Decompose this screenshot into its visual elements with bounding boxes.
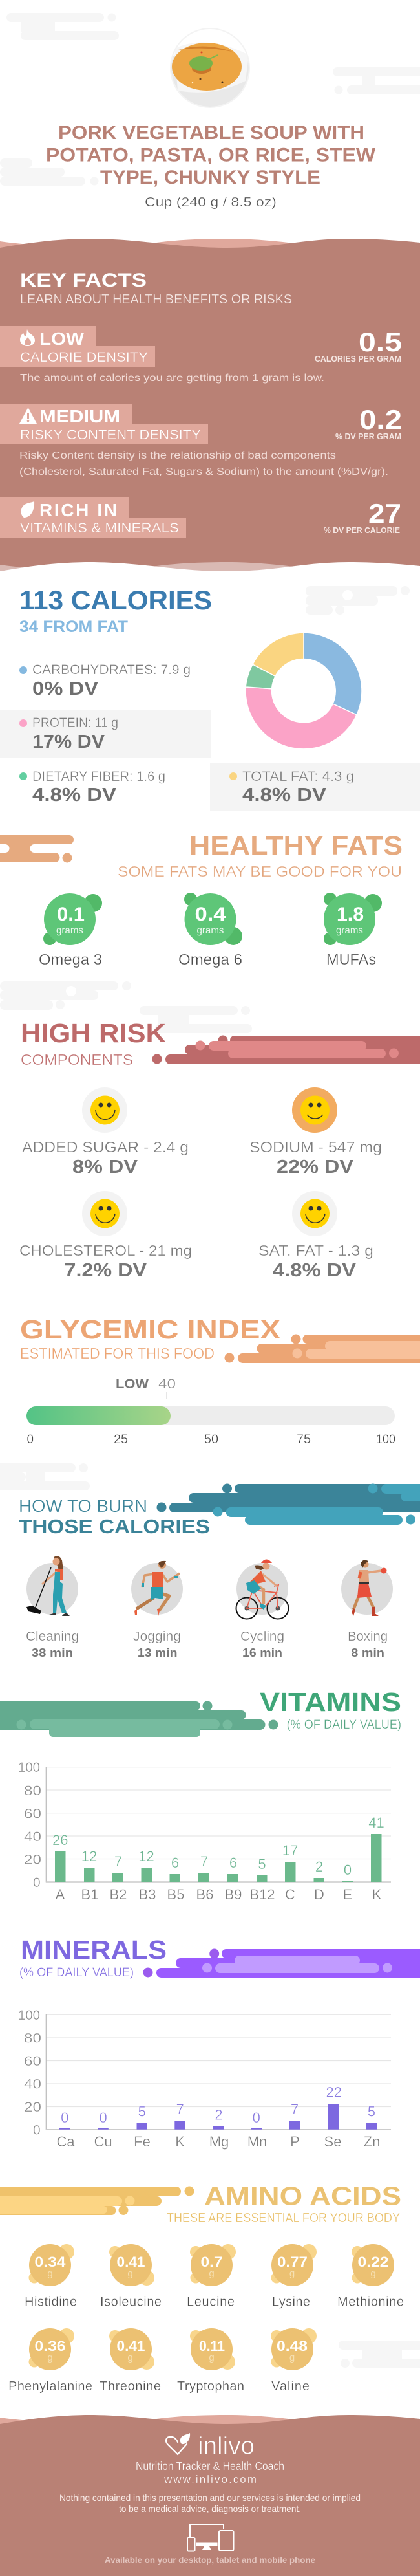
heading: key facts: LEARN ABOUT HEALTH BENEFITS OR RISKS (20, 292, 292, 307)
amino: isoleucine (100, 2244, 162, 2309)
bar chart: minerals: 5 (138, 2104, 146, 2120)
heading: glycemic index: GLYCEMIC INDEX (20, 1315, 280, 1344)
bar chart: vitamins: K (372, 1886, 382, 1903)
heading: minerals: (% OF DAILY VALUE) (19, 1965, 134, 1980)
fact: rich in vitamins and minerals: 27 (368, 498, 401, 529)
bar chart: vitamins: 41 (368, 1815, 384, 1831)
activity: boxing: Boxing (348, 1630, 388, 1644)
bar chart: minerals: 40 (24, 2077, 41, 2091)
fact: medium risky content density: RISKY CONTENT DENSITY (20, 427, 201, 442)
risk: added sugar (22, 1087, 189, 1177)
risk: cholesterol (19, 1191, 192, 1281)
fact: medium risky content density (0, 404, 402, 477)
bar chart: minerals: Zn (364, 2134, 380, 2150)
heading: amino acids (167, 2181, 401, 2225)
bar chart: vitamins: 6 (171, 1855, 179, 1871)
activity: jogging (131, 1561, 183, 1659)
amino: lysine (271, 2244, 317, 2309)
amino: phenylalanine (8, 2328, 92, 2394)
activity: jogging: 13 min (138, 1646, 177, 1659)
legend: dietary fiber (19, 769, 165, 805)
bar chart: minerals: Ca (57, 2134, 75, 2150)
bar chart: minerals: 80 (24, 2031, 41, 2046)
bar chart: vitamins: B3 (139, 1886, 156, 1903)
amino: tryptophan (177, 2328, 244, 2394)
panel: key facts (0, 239, 420, 579)
legend: protein: PROTEIN: 11 g (32, 715, 118, 730)
legend: total fat (229, 769, 354, 805)
activity: cleaning (26, 1556, 79, 1659)
heading: high risk (21, 1018, 166, 1068)
bar chart: vitamins: B6 (196, 1886, 213, 1903)
fact: medium risky content density: Risky Content density is the relationship of bad components (19, 450, 336, 461)
fact: rich in vitamins and minerals: % DV PER CALORIE (324, 526, 400, 535)
amino: methionine (337, 2244, 404, 2309)
header bars: high risk (152, 1035, 420, 1064)
activity: boxing: 8 min (351, 1646, 384, 1659)
legend: carbohydrates: CARBOHYDRATES: 7.9 g (32, 662, 191, 677)
risk: saturated fat: SAT. FAT - 1.3 g (258, 1242, 373, 1259)
activity: cycling: Cycling (240, 1630, 284, 1644)
legend: total fat: TOTAL FAT: 4.3 g (242, 769, 354, 784)
stat: mufas: grams (336, 925, 363, 936)
amino: isoleucine: 0.41 (116, 2254, 145, 2270)
availability note: Available on your desktop, tablet and mobile phone (105, 2555, 315, 2565)
bar chart: vitamins: C (285, 1886, 295, 1903)
bar chart: minerals: Cu (94, 2134, 112, 2150)
legend: carbohydrates: 0% DV (32, 679, 99, 699)
bar chart: vitamins: 20 (24, 1853, 41, 1868)
bar chart: minerals: 5 (368, 2104, 375, 2120)
fact: low calorie density: CALORIE DENSITY (20, 349, 148, 365)
amino: isoleucine: g (127, 2268, 133, 2279)
title: PORK VEGETABLE SOUP WITH (58, 122, 364, 144)
amino: tryptophan: g (209, 2352, 215, 2363)
fact: medium risky content density: % DV PER GRAM (335, 432, 401, 441)
heading: vitamins: (% OF DAILY VALUE) (287, 1718, 401, 1732)
amino: histidine: g (47, 2268, 53, 2279)
heading: glycemic index: ESTIMATED FOR THIS FOOD (20, 1345, 215, 1362)
bar chart: minerals: Mg (209, 2134, 229, 2150)
image: bowl of soup (169, 28, 250, 108)
footer url: www.inlivo.com (163, 2473, 257, 2485)
amino: valine (271, 2328, 317, 2394)
gauge: glycemic index: 25 (114, 1433, 128, 1446)
bar chart: vitamins: 12 (138, 1848, 154, 1864)
gauge: glycemic index (26, 1377, 395, 1446)
risk: saturated fat (258, 1191, 373, 1281)
bar chart: minerals: Fe (134, 2134, 151, 2150)
stat: mufas: MUFAs (326, 951, 376, 968)
heading: high risk: HIGH RISK (21, 1018, 166, 1048)
legend band: protein (0, 710, 211, 758)
gauge: glycemic index: 75 (297, 1433, 311, 1446)
amino: histidine: 0.34 (35, 2254, 66, 2270)
heading: how to burn: HOW TO BURN (19, 1496, 147, 1516)
bar chart: vitamins: 6 (229, 1855, 237, 1871)
amino: threonine: 0.41 (116, 2338, 145, 2354)
panel: footer (0, 2415, 420, 2576)
bar chart: minerals: 0 (253, 2110, 260, 2126)
heading: healthy fats (118, 831, 403, 880)
fact: low calorie density: 0.5 (359, 327, 402, 357)
bar chart: vitamins: B5 (167, 1886, 184, 1903)
fact: low calorie density: CALORIES PER GRAM (315, 355, 401, 364)
header bars: glycemic index (225, 1334, 420, 1363)
risk: sodium (249, 1087, 382, 1177)
bar chart: vitamins: 7 (200, 1853, 208, 1870)
bar chart: minerals: K (175, 2134, 185, 2150)
heading: high risk: COMPONENTS (21, 1051, 133, 1068)
legend: protein (19, 715, 118, 752)
header bars: amino acids (0, 2187, 194, 2215)
bar chart: vitamins: 60 (24, 1807, 41, 1822)
bar chart: vitamins: 40 (24, 1829, 41, 1844)
heading: minerals: MINERALS (21, 1935, 167, 1965)
heading: key facts (20, 270, 292, 307)
bar chart: vitamins: 26 (52, 1832, 68, 1848)
amino: phenylalanine: 0.36 (35, 2338, 66, 2354)
icon: devices (187, 2524, 234, 2551)
stat: omega 3 (39, 893, 102, 968)
heading: minerals (19, 1935, 167, 1980)
title: POTATO, PASTA, OR RICE, STEW (46, 145, 376, 166)
amino: leucine (187, 2244, 236, 2309)
stat: omega 3: Omega 3 (39, 951, 102, 968)
amino: lysine: 0.77 (277, 2254, 308, 2270)
amino: lysine: g (289, 2268, 295, 2279)
footer tagline: Nutrition Tracker & Health Coach (136, 2460, 284, 2472)
risk: saturated fat: 4.8% DV (273, 1260, 357, 1281)
serving size: Cup (240 g / 8.5 oz) (145, 195, 277, 210)
amino: threonine: Threonine (100, 2379, 161, 2394)
heading: how to burn (19, 1496, 210, 1538)
fact: medium risky content density: 0.2 (359, 404, 402, 435)
bar chart: vitamins: B2 (110, 1886, 127, 1903)
amino: leucine: Leucine (187, 2295, 235, 2309)
gauge: glycemic index: 100 (376, 1433, 395, 1446)
amino: phenylalanine: Phenylalanine (8, 2379, 92, 2394)
heading: vitamins (260, 1687, 401, 1732)
fact: low calorie density: LOW (39, 329, 85, 349)
heading: glycemic index (20, 1315, 280, 1362)
bar chart: vitamins (18, 1760, 391, 1903)
bar chart: vitamins: 2 (315, 1859, 323, 1875)
header bars: healthy fats (0, 835, 74, 863)
activity: jogging: Jogging (133, 1630, 181, 1644)
stat: omega 6: 0.4 (195, 904, 226, 925)
activity: cycling: 16 min (242, 1646, 282, 1659)
stat: omega 3: grams (56, 925, 83, 936)
bar chart: minerals: 7 (176, 2101, 184, 2117)
logo: inlivo: inlivo (198, 2432, 255, 2460)
bar chart: vitamins: 7 (114, 1853, 122, 1870)
heading: vitamins: VITAMINS (260, 1687, 401, 1717)
header bars: minerals (143, 1948, 420, 1978)
amino: tryptophan: Tryptophan (177, 2379, 244, 2394)
heading: calories (19, 585, 212, 636)
heading: healthy fats: SOME FATS MAY BE GOOD FOR YOU (118, 863, 402, 880)
disclaimer (59, 2493, 361, 2514)
bar chart: vitamins: 100 (18, 1760, 40, 1775)
stat: mufas: 1.8 (337, 904, 364, 925)
amino: lysine: Lysine (272, 2295, 310, 2309)
bar chart: vitamins: 12 (81, 1848, 97, 1864)
activity: cycling (236, 1559, 288, 1659)
amino: valine: Valine (271, 2379, 310, 2394)
legend: protein: 17% DV (32, 732, 105, 752)
legend: dietary fiber: DIETARY FIBER: 1.6 g (32, 769, 165, 784)
logo: inlivo (166, 2432, 255, 2460)
legend: dietary fiber: 4.8% DV (32, 785, 117, 805)
title (46, 122, 376, 188)
heading: how to burn: THOSE CALORIES (19, 1515, 210, 1538)
activity: cleaning: Cleaning (26, 1630, 79, 1644)
risk: sodium: SODIUM - 547 mg (249, 1139, 382, 1155)
amino: leucine: g (209, 2268, 215, 2279)
bar chart: minerals (18, 2008, 391, 2150)
risk: sodium: 22% DV (277, 1157, 354, 1177)
bar chart: vitamins: 80 (24, 1784, 41, 1798)
donut chart: macronutrients (246, 633, 362, 749)
amino: methionine: g (370, 2268, 376, 2279)
bar chart: minerals: 22 (326, 2084, 342, 2101)
amino: isoleucine: Isoleucine (100, 2295, 162, 2309)
heading: calories: 113 CALORIES (19, 585, 212, 615)
amino: tryptophan: 0.11 (199, 2338, 225, 2354)
bar chart: vitamins: 0 (33, 1875, 41, 1890)
amino: methionine: Methionine (337, 2295, 404, 2309)
gauge: glycemic index: 50 (204, 1433, 218, 1446)
bar chart: minerals: Se (324, 2134, 341, 2150)
stat: omega 6 (178, 893, 242, 968)
bar chart: minerals: 60 (24, 2054, 41, 2069)
bar chart: vitamins: B12 (249, 1886, 275, 1903)
stat: omega 6: Omega 6 (178, 951, 242, 968)
legend: total fat: 4.8% DV (242, 785, 327, 805)
fact: rich in vitamins and minerals: VITAMINS & MINERALS (20, 520, 179, 536)
bar chart: vitamins: D (314, 1886, 324, 1903)
fact: medium risky content density: (Cholesterol, Saturated Fat, Sugars & Sodium) to the amount (%DV/gr). (19, 466, 388, 477)
bar chart: minerals: 0 (61, 2110, 68, 2126)
bar chart: minerals: 20 (24, 2100, 41, 2115)
amino: valine: 0.48 (277, 2338, 308, 2354)
risk: cholesterol: 7.2% DV (65, 1260, 147, 1281)
amino: leucine: 0.7 (200, 2254, 222, 2270)
bar chart: vitamins: B1 (81, 1886, 98, 1903)
amino: histidine (25, 2244, 77, 2309)
stat: mufas (324, 893, 382, 968)
heading: calories: 34 FROM FAT (19, 618, 128, 636)
risk: added sugar: 8% DV (72, 1157, 138, 1177)
legend band: total fat (210, 763, 420, 811)
amino: histidine: Histidine (25, 2295, 77, 2309)
header bars: burn calories (156, 1484, 420, 1525)
heading: key facts: KEY FACTS (20, 270, 147, 291)
disclaimer: Nothing contained in this presentation and our services is intended or implied (59, 2493, 361, 2503)
bar chart: minerals: 0 (99, 2110, 107, 2126)
activity: cleaning: 38 min (32, 1646, 73, 1659)
amino: phenylalanine: g (47, 2352, 53, 2363)
amino: valine: g (289, 2352, 295, 2363)
bar chart: vitamins: A (56, 1886, 65, 1903)
bar chart: minerals: 100 (18, 2008, 40, 2023)
heading: amino acids: AMINO ACIDS (204, 2181, 401, 2211)
fact: rich in vitamins and minerals: RICH IN (39, 500, 117, 520)
header bars: vitamins (0, 1701, 278, 1737)
disclaimer: to be a medical advice, diagnosis or treatment. (119, 2504, 301, 2514)
stat: omega 3: 0.1 (57, 904, 85, 925)
bar chart: vitamins: 17 (282, 1842, 298, 1859)
gauge: glycemic index: LOW (116, 1377, 149, 1392)
bar chart: vitamins: B9 (225, 1886, 242, 1903)
risk: cholesterol: CHOLESTEROL - 21 mg (19, 1242, 192, 1259)
bar chart: minerals: 7 (291, 2101, 299, 2117)
amino: methionine: 0.22 (358, 2254, 389, 2270)
fact: medium risky content density: MEDIUM (39, 406, 120, 426)
fact: rich in vitamins and minerals (0, 497, 401, 538)
amino: threonine: g (127, 2352, 133, 2363)
title: TYPE, CHUNKY STYLE (100, 167, 320, 188)
bar chart: minerals: Mn (247, 2134, 267, 2150)
bar chart: vitamins: E (343, 1886, 352, 1903)
stat: omega 6: grams (196, 925, 224, 936)
bar chart: minerals: 0 (33, 2123, 41, 2137)
legend: carbohydrates (19, 662, 191, 699)
amino: threonine (100, 2328, 161, 2394)
fact: low calorie density (0, 326, 402, 384)
gauge: glycemic index: 40 (158, 1377, 176, 1392)
bar chart: vitamins: 0 (344, 1862, 352, 1878)
heading: healthy fats: HEALTHY FATS (189, 831, 403, 860)
bar chart: minerals: P (290, 2134, 300, 2150)
risk: added sugar: ADDED SUGAR - 2.4 g (22, 1139, 189, 1155)
bar chart: minerals: 2 (215, 2107, 223, 2123)
activity: boxing (341, 1560, 393, 1659)
bar chart: vitamins: 5 (258, 1856, 266, 1872)
gauge: glycemic index: 0 (27, 1433, 34, 1446)
fact: low calorie density: The amount of calories you are getting from 1 gram is low. (20, 373, 324, 384)
